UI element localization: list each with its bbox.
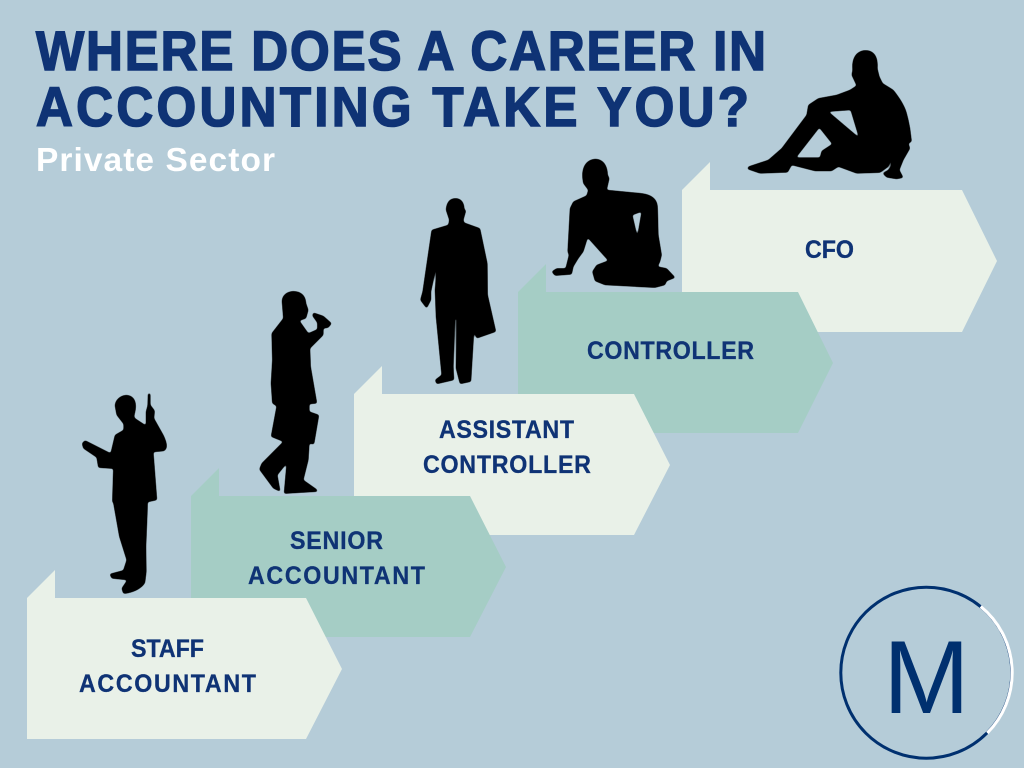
silhouette: person sitting — [747, 50, 912, 179]
step: controller: CONTROLLER — [587, 337, 754, 365]
subtitle: Private Sector — [36, 142, 275, 179]
title: ACCOUNTING TAKE YOU? — [36, 77, 749, 138]
step: staff accountant: STAFF — [131, 635, 204, 663]
step: staff accountant: ACCOUNTANT — [79, 670, 256, 698]
step: senior accountant — [191, 468, 506, 637]
title — [36, 21, 766, 138]
title: WHERE DOES A CAREER IN — [36, 21, 766, 82]
logo: M in a circle — [841, 587, 1012, 758]
step: assistant controller: ASSISTANT — [439, 416, 574, 444]
step: CFO: CFO — [805, 236, 854, 264]
step: CFO — [682, 162, 997, 332]
silhouette: person with document and pen — [82, 393, 167, 594]
step: senior accountant: SENIOR — [290, 527, 383, 555]
silhouette: person with briefcase — [259, 291, 332, 494]
step: senior accountant: ACCOUNTANT — [248, 562, 425, 590]
step: assistant controller — [354, 366, 670, 535]
silhouette: person kneeling — [552, 159, 675, 288]
step: controller — [518, 264, 833, 433]
silhouette: person standing with bag — [420, 198, 496, 384]
step: staff accountant — [27, 570, 342, 739]
step: assistant controller: CONTROLLER — [423, 451, 591, 479]
logo: M in a circle: M — [883, 620, 970, 736]
